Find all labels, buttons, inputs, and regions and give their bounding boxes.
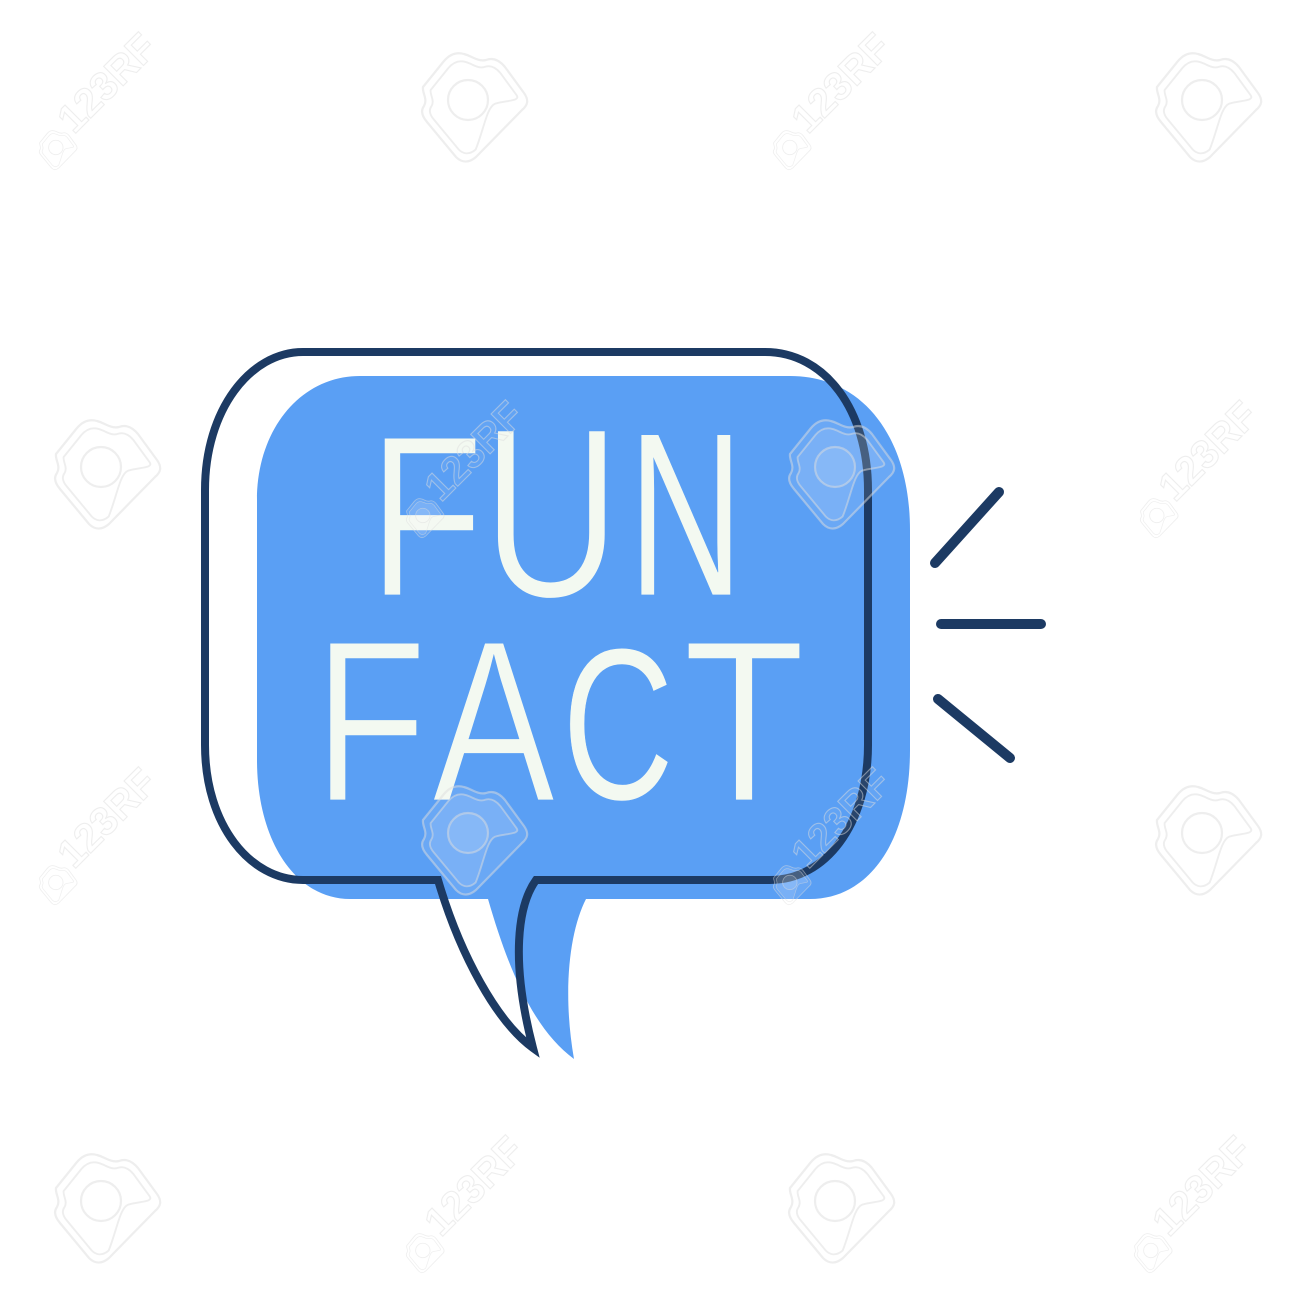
heading: FACT: A <box>432 593 556 851</box>
heading: FACT <box>314 591 805 851</box>
watermark text: 123RF <box>1150 393 1266 509</box>
heading: FACT: T <box>683 591 805 850</box>
heading: FUN: F <box>368 387 484 645</box>
heading: FACT: F <box>314 593 427 851</box>
heading: FUN: N <box>628 385 744 645</box>
emphasis rays <box>935 492 1041 758</box>
speech bubble outline <box>205 352 868 1048</box>
heading: FUN <box>368 378 744 649</box>
watermark text: 123RF <box>416 393 532 509</box>
watermark text: 123RF <box>416 1128 532 1244</box>
watermark text: 123RF <box>783 760 899 876</box>
watermark text: 123RF <box>1144 1128 1260 1244</box>
watermark text: 123RF <box>783 25 899 141</box>
blue speech bubble fill <box>257 376 910 1059</box>
watermark text: 123RF <box>49 25 165 141</box>
heading: FACT: C <box>562 604 674 845</box>
watermark text: 123RF <box>49 760 165 876</box>
heading: FUN: U <box>482 378 621 649</box>
